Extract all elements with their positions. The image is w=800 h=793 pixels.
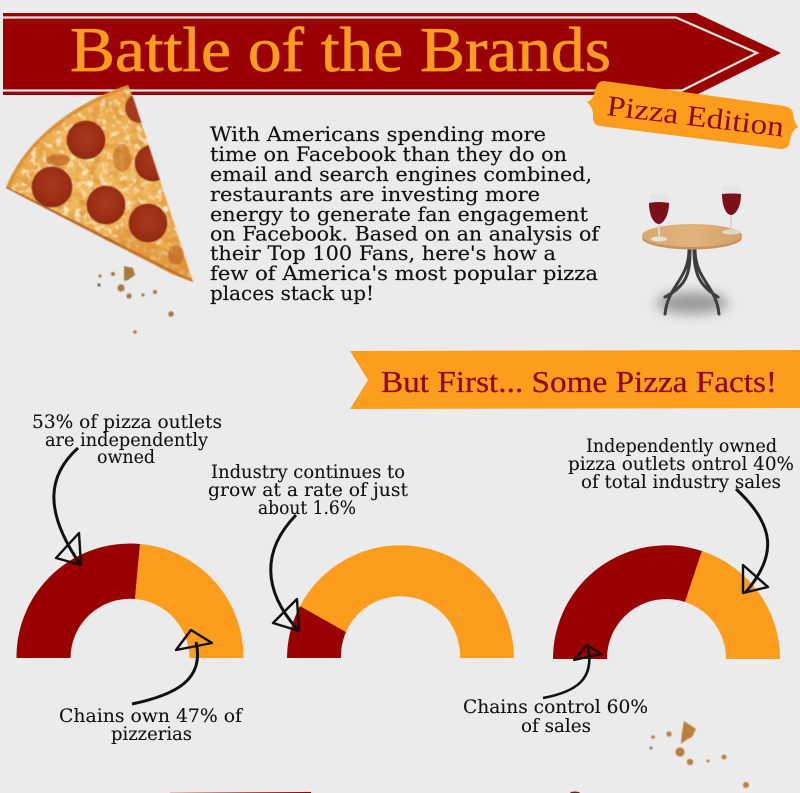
intro paragraph: restaurants are investing more [210,183,540,206]
intro paragraph: energy to generate fan engagement [210,203,588,226]
fact: independents sales share [568,436,794,493]
fact: independents sales share: of total industry sales [581,472,781,493]
fact: 53 percent independent: are independently [45,430,209,451]
fact: independents sales share: pizza outlets ontrol 40% [568,454,794,475]
title banner [3,13,781,95]
fact: chains own 47 percent: pizzerias [111,724,192,745]
intro paragraph [210,123,601,305]
icon: table with wine glasses [642,186,742,314]
arrow: to 53 percent segment [54,448,81,565]
fact: independents sales share: Independently owned [586,436,777,457]
crumbs lower right [650,721,749,788]
chart: gauge 60 / 40 [553,545,780,659]
fact: 53 percent independent [32,412,222,468]
intro paragraph: time on Facebook than they do on [210,143,567,166]
next section edge [170,792,580,793]
section heading: But First... Some Pizza Facts! [381,364,777,399]
fact: chains control 60 percent: Chains control 60% [463,697,648,718]
badge: Pizza Edition [587,81,798,149]
section ribbon [350,350,800,409]
intro paragraph: email and search engines combined, [210,163,592,186]
intro paragraph: their Top 100 Fans, here's how a [210,242,556,265]
arrow: to 1.6 percent segment [271,515,299,631]
chart: gauge 53 / 47 [16,544,244,658]
arrow: to 40 percent segment [736,489,768,593]
arrow: to 47 percent segment [132,630,212,704]
chart: gauge 1.6 percent [287,545,514,658]
fact: chains control 60 percent: of sales [521,716,591,737]
fact: chains own 47 percent [59,706,243,745]
intro paragraph: on Facebook. Based on an analysis of [210,222,601,246]
crumbs near slice [97,266,174,334]
fact: industry growth [208,462,409,519]
fact: 53 percent independent: 53% of pizza outlets [32,412,222,433]
badge text: Pizza Edition [605,90,786,144]
arrow: to 60 percent segment [543,645,601,698]
fact: industry growth: Industry continues to [211,462,405,483]
intro paragraph: few of America's most popular pizza [210,262,598,285]
intro paragraph: places stack up! [210,282,374,305]
fact: industry growth: about 1.6% [258,498,356,519]
intro paragraph: With Americans spending more [210,123,546,146]
fact: chains own 47 percent: Chains own 47% of [59,706,243,727]
icon: pizza slice [5,84,194,283]
title: Battle of the Brands [70,15,611,85]
fact: chains control 60 percent [463,697,648,737]
fact: industry growth: grow at a rate of just [208,480,409,501]
fact: 53 percent independent: owned [97,447,155,468]
